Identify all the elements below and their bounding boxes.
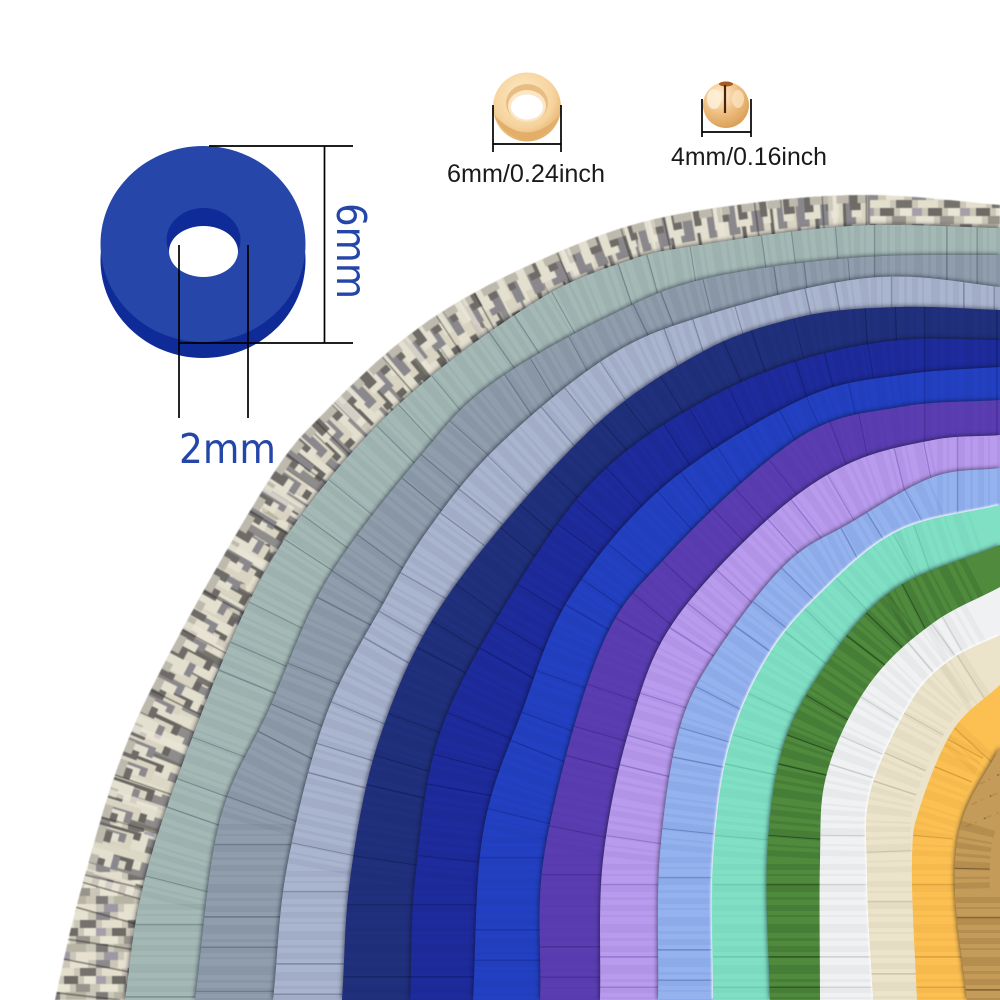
strand: dark blue (410, 339, 1000, 1000)
strand: mint (712, 505, 1000, 1000)
label: 6mm/0.24inch: 6mm/0.24inch (447, 160, 605, 188)
strand: tan (955, 747, 1000, 1000)
strand: navy (342, 307, 1000, 1000)
label: 6mm: 6mm (327, 203, 375, 299)
strand: lavender grey (273, 277, 1000, 1000)
label: 4mm/0.16inch: 4mm/0.16inch (671, 143, 827, 171)
strand: purple (539, 400, 1000, 1000)
icon: blue clay disc (100, 146, 306, 358)
icon: gold 6mm spacer bead (493, 72, 561, 142)
strand: light blue (658, 468, 1000, 1000)
dimension lines: 6mm bead (493, 105, 561, 152)
dimension lines: disc 6mm and 2mm (179, 146, 353, 418)
strand: sage (125, 225, 1000, 1000)
strand: yellow (912, 685, 1000, 1000)
strand: green (766, 545, 1000, 1000)
strand: speckled grey and cream (50, 195, 1000, 1000)
icon: gold 4mm round bead (703, 82, 749, 128)
strand: cream (866, 635, 1000, 1000)
strand: slate grey (195, 255, 1000, 1000)
strand: lilac (600, 435, 1000, 1000)
strand: royal blue (473, 367, 1000, 1000)
strand: white (820, 587, 1000, 1000)
dimension lines: 4mm bead (702, 99, 751, 137)
label: 2mm: 2mm (179, 425, 276, 473)
